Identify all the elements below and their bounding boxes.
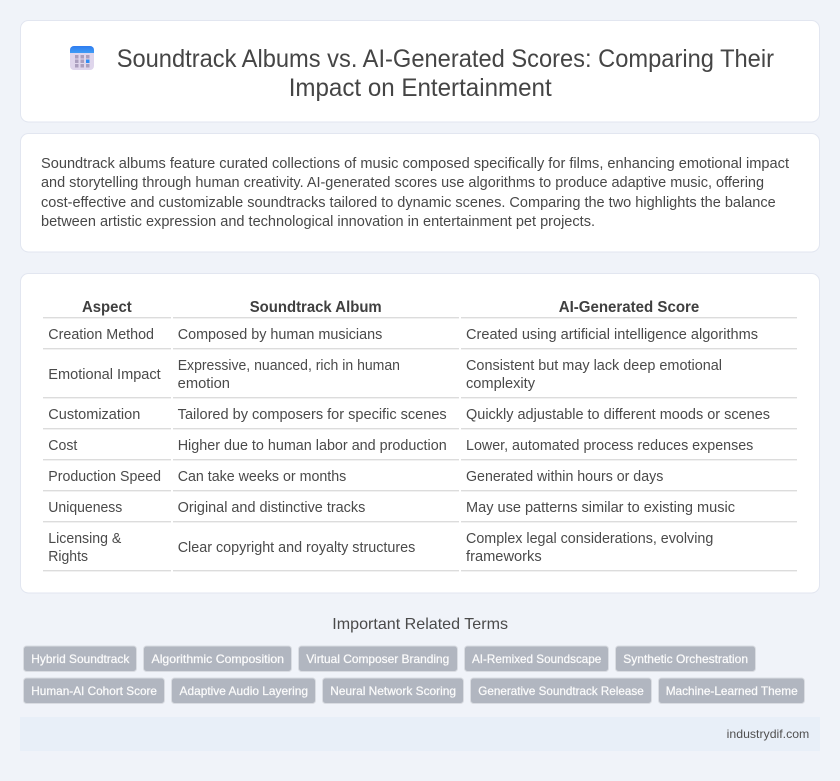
heading: important related terms: Important Related Terms xyxy=(332,616,508,633)
text block: introduction paragraph: between artistic expression and technological innovation in entertainment pet projects. xyxy=(41,214,595,230)
table header: Aspect xyxy=(82,299,132,316)
row: customization: Tailored by composers for specific scenes xyxy=(178,407,447,423)
tag: synthetic orchestration: Synthetic Orchestration xyxy=(623,652,748,666)
title: Soundtrack Albums vs. AI-Generated Scores: Comparing Their xyxy=(117,45,774,73)
tag: human-ai cohort score xyxy=(24,678,164,704)
footer bar xyxy=(20,717,820,751)
panel: introduction xyxy=(20,134,820,252)
tag: human-ai cohort score: Human-AI Cohort Score xyxy=(31,684,157,698)
text block: introduction paragraph: cost-effective and customizable soundtracks tailored to dynamic scenes. Comparing the two highlights the balance xyxy=(41,195,776,211)
text block: introduction paragraph: Soundtrack albums feature curated collections of music composed specifically for films, enhancing emotional impact xyxy=(41,156,789,172)
row: licensing and rights: frameworks xyxy=(466,549,542,565)
row: emotional impact: complexity xyxy=(466,376,536,392)
tag: generative soundtrack release: Generative Soundtrack Release xyxy=(478,684,644,698)
row: uniqueness: May use patterns similar to existing music xyxy=(466,500,735,516)
tag: hybrid soundtrack xyxy=(24,646,136,672)
row: customization: Quickly adjustable to different moods or scenes xyxy=(466,407,770,423)
icon: calendar grid xyxy=(70,46,94,70)
tag: synthetic orchestration xyxy=(616,646,756,672)
tag: neural network scoring xyxy=(322,678,464,704)
table header: Soundtrack Album xyxy=(250,299,382,316)
tag: algorithmic composition: Algorithmic Composition xyxy=(152,652,284,666)
row: production speed: Production Speed xyxy=(48,469,161,485)
row: licensing and rights xyxy=(48,531,713,565)
row: licensing and rights: Clear copyright and royalty structures xyxy=(178,540,415,556)
text block: introduction paragraph: and storytelling through human creativity. AI-generated scores use algorithms to produce adaptive music, offering xyxy=(41,175,764,191)
row: emotional impact: emotion xyxy=(178,376,230,392)
footer bar: industrydif.com xyxy=(727,727,809,741)
row: licensing and rights: Licensing & xyxy=(48,531,122,547)
panel: comparison table xyxy=(20,274,820,593)
row: cost: Cost xyxy=(48,438,77,454)
row: production speed: Can take weeks or months xyxy=(178,469,346,485)
row: licensing and rights: Complex legal considerations, evolving xyxy=(466,531,713,547)
row: production speed: Generated within hours or days xyxy=(466,469,663,485)
tag: hybrid soundtrack: Hybrid Soundtrack xyxy=(31,652,130,666)
text block: introduction paragraph xyxy=(41,156,789,230)
row: customization: Customization xyxy=(48,407,140,423)
tag: adaptive audio layering: Adaptive Audio Layering xyxy=(180,684,308,698)
tag: ai-remixed soundscape: AI-Remixed Soundscape xyxy=(472,652,602,666)
row: customization xyxy=(48,407,770,423)
panel: title card xyxy=(20,20,820,122)
table header: AI-Generated Score xyxy=(559,299,700,316)
tag: virtual composer branding: Virtual Composer Branding xyxy=(306,652,449,666)
row: uniqueness: Uniqueness xyxy=(48,500,122,516)
row: emotional impact: Emotional Impact xyxy=(48,367,161,383)
row: emotional impact: Consistent but may lack deep emotional xyxy=(466,358,722,374)
row: cost xyxy=(48,438,753,454)
tag: algorithmic composition xyxy=(144,646,292,672)
row: creation method: Created using artificial intelligence algorithms xyxy=(466,327,758,343)
row: production speed xyxy=(48,469,663,485)
tag: ai-remixed soundscape xyxy=(464,646,608,672)
tag list: related terms xyxy=(24,646,804,704)
row: cost: Higher due to human labor and production xyxy=(178,438,447,454)
row: licensing and rights: Rights xyxy=(48,549,88,565)
tag: machine-learned theme xyxy=(658,678,804,704)
row: creation method xyxy=(48,327,758,343)
row: cost: Lower, automated process reduces expenses xyxy=(466,438,753,454)
row: uniqueness: Original and distinctive tracks xyxy=(178,500,365,516)
row: creation method: Composed by human musicians xyxy=(178,327,382,343)
row: emotional impact: Expressive, nuanced, rich in human xyxy=(178,358,400,374)
table header xyxy=(82,299,700,316)
tag: generative soundtrack release xyxy=(470,678,652,704)
tag: adaptive audio layering xyxy=(172,678,316,704)
title xyxy=(117,45,774,102)
row: uniqueness xyxy=(48,500,735,516)
title: Impact on Entertainment xyxy=(289,74,552,102)
tag: neural network scoring: Neural Network Scoring xyxy=(330,684,456,698)
row: creation method: Creation Method xyxy=(48,327,154,343)
row: emotional impact xyxy=(48,358,722,392)
tag: virtual composer branding xyxy=(298,646,458,672)
tag: machine-learned theme: Machine-Learned Theme xyxy=(666,684,798,698)
